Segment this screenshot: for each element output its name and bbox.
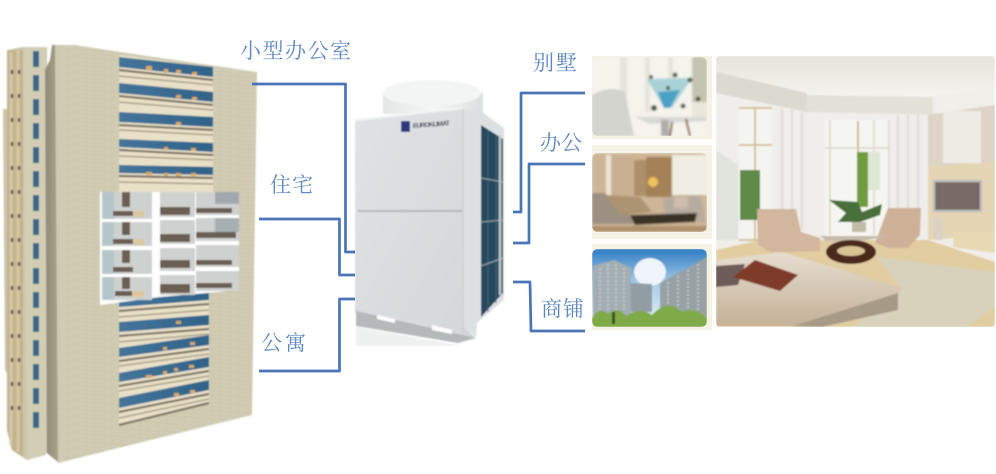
- plant and table: [829, 200, 882, 222]
- main facade: [55, 45, 257, 463]
- label: residence: 住宅: [270, 173, 313, 197]
- label: villa: 别墅: [533, 51, 577, 75]
- unit fan cylinder: [383, 80, 483, 115]
- unit brand logo: EUROKLIMAT: [413, 120, 450, 130]
- bed: [716, 252, 902, 326]
- photo: living room: [592, 153, 707, 232]
- labels: [240, 39, 584, 355]
- cushions: [716, 264, 745, 287]
- tv console steps: [953, 232, 995, 253]
- building cutaway floors: [100, 192, 239, 305]
- lower window panel: [119, 293, 209, 425]
- left wing of building: [3, 47, 47, 460]
- connector lines: [252, 84, 585, 371]
- unit base frame: [356, 311, 476, 346]
- armchairs: [757, 209, 820, 252]
- line: apartment: [259, 299, 355, 371]
- line: villa: [513, 93, 585, 212]
- label: small office: 小型办公室: [240, 39, 351, 63]
- line: small office: [252, 84, 355, 252]
- floor: [716, 240, 995, 327]
- unit front panel: [355, 108, 475, 338]
- photo: bedroom lounge: [716, 56, 995, 327]
- photo strip backing: [592, 56, 712, 330]
- side windows: [33, 51, 39, 428]
- unit side panel: [463, 109, 504, 338]
- label: office: 办公: [540, 131, 582, 155]
- label: apartment: 公寓: [261, 331, 306, 355]
- building: [3, 45, 257, 463]
- right wall: [928, 105, 995, 166]
- photo: villa interior: [592, 57, 707, 136]
- ceiling and wall trim: [716, 56, 995, 71]
- label: shop: 商铺: [541, 297, 584, 321]
- line: residence: [259, 219, 355, 275]
- outdoor unit: [355, 80, 504, 346]
- upper window panel: [119, 55, 213, 192]
- facade side shadow: [45, 45, 59, 463]
- television: [934, 181, 981, 211]
- curtains and windows: [716, 93, 928, 240]
- line: office: [513, 164, 585, 243]
- line: shop: [513, 282, 585, 331]
- photo: apartment towers: [592, 249, 707, 327]
- unit brand logo: [401, 120, 450, 132]
- rug: [853, 257, 995, 327]
